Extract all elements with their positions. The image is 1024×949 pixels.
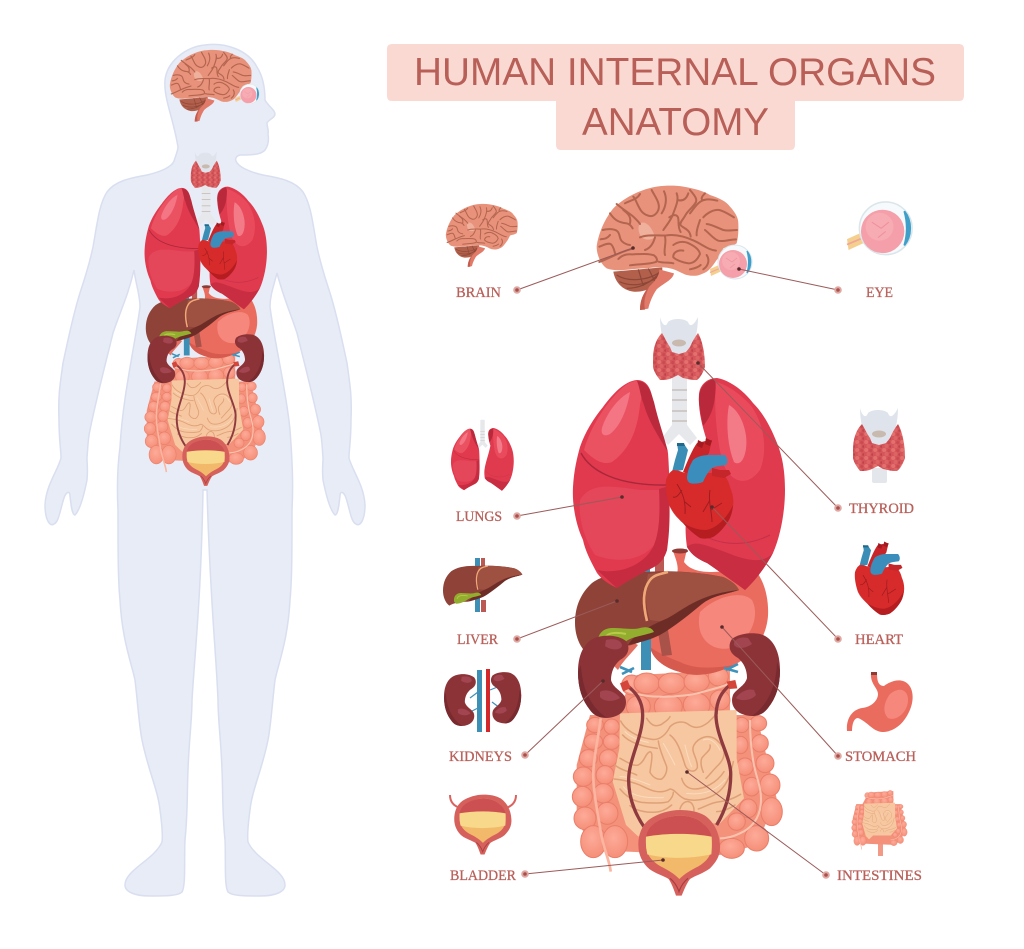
label: liver: LIVER bbox=[457, 632, 498, 648]
icon: intestines bbox=[852, 790, 907, 856]
label: intestines: INTESTINES bbox=[837, 868, 922, 884]
icon: bladder bbox=[450, 795, 516, 855]
icon: lungs bbox=[451, 420, 514, 491]
leader lines bbox=[517, 248, 838, 875]
label: bladder: BLADDER bbox=[450, 868, 516, 884]
title text: HUMAN INTERNAL ORGANS bbox=[414, 51, 936, 94]
leader end dots on organs bbox=[601, 246, 741, 862]
body outline bbox=[45, 44, 365, 896]
label: stomach: STOMACH bbox=[845, 749, 917, 765]
icon: eye bbox=[847, 202, 912, 255]
human body silhouette with organs bbox=[45, 44, 365, 896]
label: eye: EYE bbox=[866, 285, 893, 301]
icon: kidneys bbox=[444, 669, 521, 732]
label: thyroid: THYROID bbox=[849, 501, 914, 517]
brain and eye in head bbox=[170, 50, 259, 122]
icon: heart bbox=[855, 542, 904, 615]
large eye bbox=[710, 245, 752, 279]
title bbox=[387, 44, 964, 150]
label: heart: HEART bbox=[855, 632, 903, 648]
leader label dots bbox=[514, 287, 841, 878]
organs in torso bbox=[144, 151, 267, 486]
icon: brain bbox=[446, 204, 518, 267]
label: kidneys: KIDNEYS bbox=[449, 749, 512, 765]
label: brain: BRAIN bbox=[456, 285, 502, 301]
title background bbox=[387, 44, 964, 150]
icon: thyroid bbox=[853, 408, 905, 483]
title text line 2: ANATOMY bbox=[582, 101, 769, 144]
large brain bbox=[597, 186, 738, 310]
label: lungs: LUNGS bbox=[456, 509, 502, 525]
icon: liver bbox=[443, 558, 522, 612]
icon: stomach bbox=[847, 672, 913, 732]
large organ composite bbox=[572, 317, 785, 896]
